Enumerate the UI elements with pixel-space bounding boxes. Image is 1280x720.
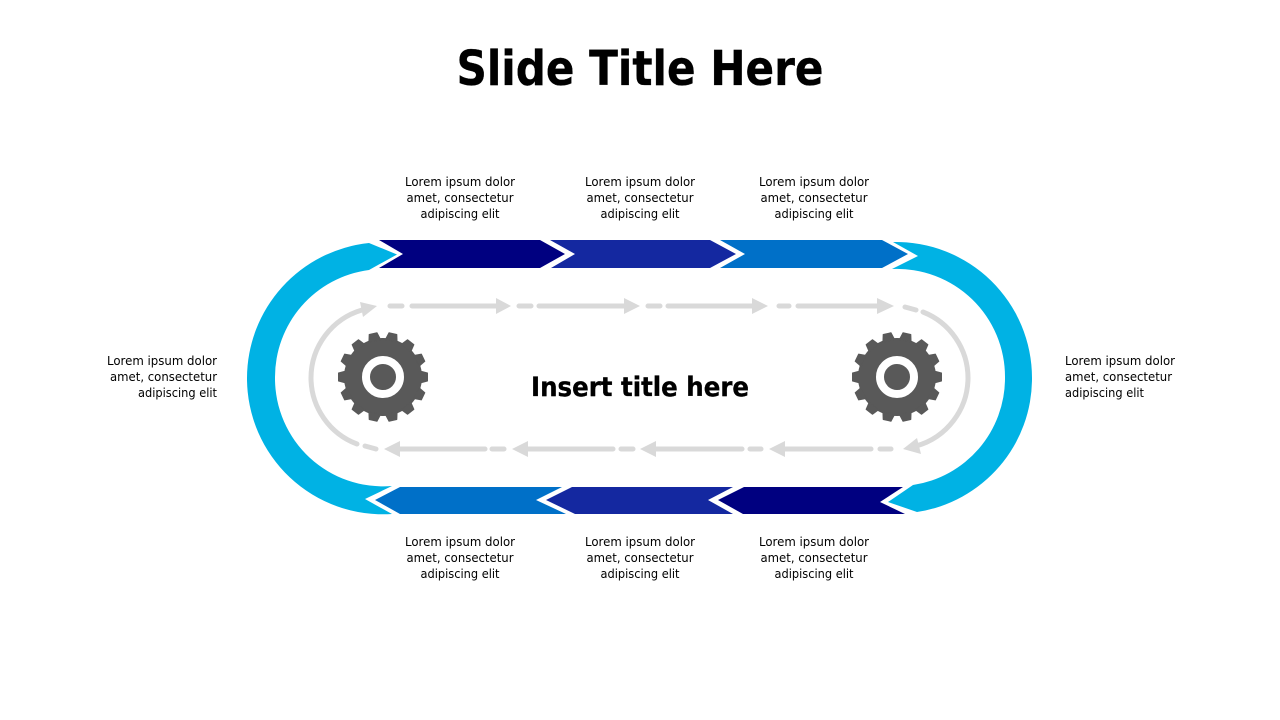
text: top center: adipiscing elit xyxy=(600,207,680,221)
text: bottom left: amet, consectetur xyxy=(406,551,514,565)
text: bottom center: amet, consectetur xyxy=(586,551,694,565)
text: right side: Lorem ipsum dolor xyxy=(1065,354,1175,368)
text: bottom right: Lorem ipsum dolor xyxy=(759,535,869,549)
text: top right: Lorem ipsum dolor xyxy=(759,175,869,189)
icon: right gear xyxy=(852,332,942,422)
text: top center: amet, consectetur xyxy=(586,191,694,205)
text: bottom left xyxy=(405,535,515,581)
bottom chevron 1 xyxy=(375,487,566,514)
text: top left: amet, consectetur xyxy=(406,191,514,205)
top chevron 1 xyxy=(379,240,565,268)
text: top center xyxy=(585,175,695,221)
text: left side: Lorem ipsum dolor xyxy=(107,354,217,368)
text: left side: adipiscing elit xyxy=(138,386,217,400)
text: bottom left: adipiscing elit xyxy=(420,567,500,581)
text: bottom center: Lorem ipsum dolor xyxy=(585,535,695,549)
text: top right: amet, consectetur xyxy=(760,191,868,205)
text: bottom right: adipiscing elit xyxy=(774,567,854,581)
icon: left gear xyxy=(338,332,428,422)
text: top left: adipiscing elit xyxy=(420,207,500,221)
text: top center: Lorem ipsum dolor xyxy=(585,175,695,189)
top chevron 3 xyxy=(720,240,908,268)
bottom chevron 2 xyxy=(546,487,733,514)
text: right side: amet, consectetur xyxy=(1065,370,1172,384)
text: right side xyxy=(1065,354,1175,400)
title: Slide Title Here xyxy=(456,41,824,97)
bottom chevron 3 xyxy=(718,487,905,514)
top chevron 2 xyxy=(550,240,736,268)
looping arrow band xyxy=(247,240,1032,514)
text: right side: adipiscing elit xyxy=(1065,386,1144,400)
left curved arrow segment xyxy=(247,243,397,514)
text: bottom left: Lorem ipsum dolor xyxy=(405,535,515,549)
text: bottom right xyxy=(759,535,869,581)
text: top right xyxy=(759,175,869,221)
text: top right: adipiscing elit xyxy=(774,207,854,221)
text: bottom center xyxy=(585,535,695,581)
text: left side xyxy=(107,354,217,400)
text: left side: amet, consectetur xyxy=(110,370,217,384)
right curved arrow segment xyxy=(888,242,1032,512)
center title: Insert title here xyxy=(531,372,749,403)
text: top left: Lorem ipsum dolor xyxy=(405,175,515,189)
inner dashed grey arrow loop xyxy=(311,298,968,457)
text: bottom right: amet, consectetur xyxy=(760,551,868,565)
text: top left xyxy=(405,175,515,221)
text: bottom center: adipiscing elit xyxy=(600,567,680,581)
